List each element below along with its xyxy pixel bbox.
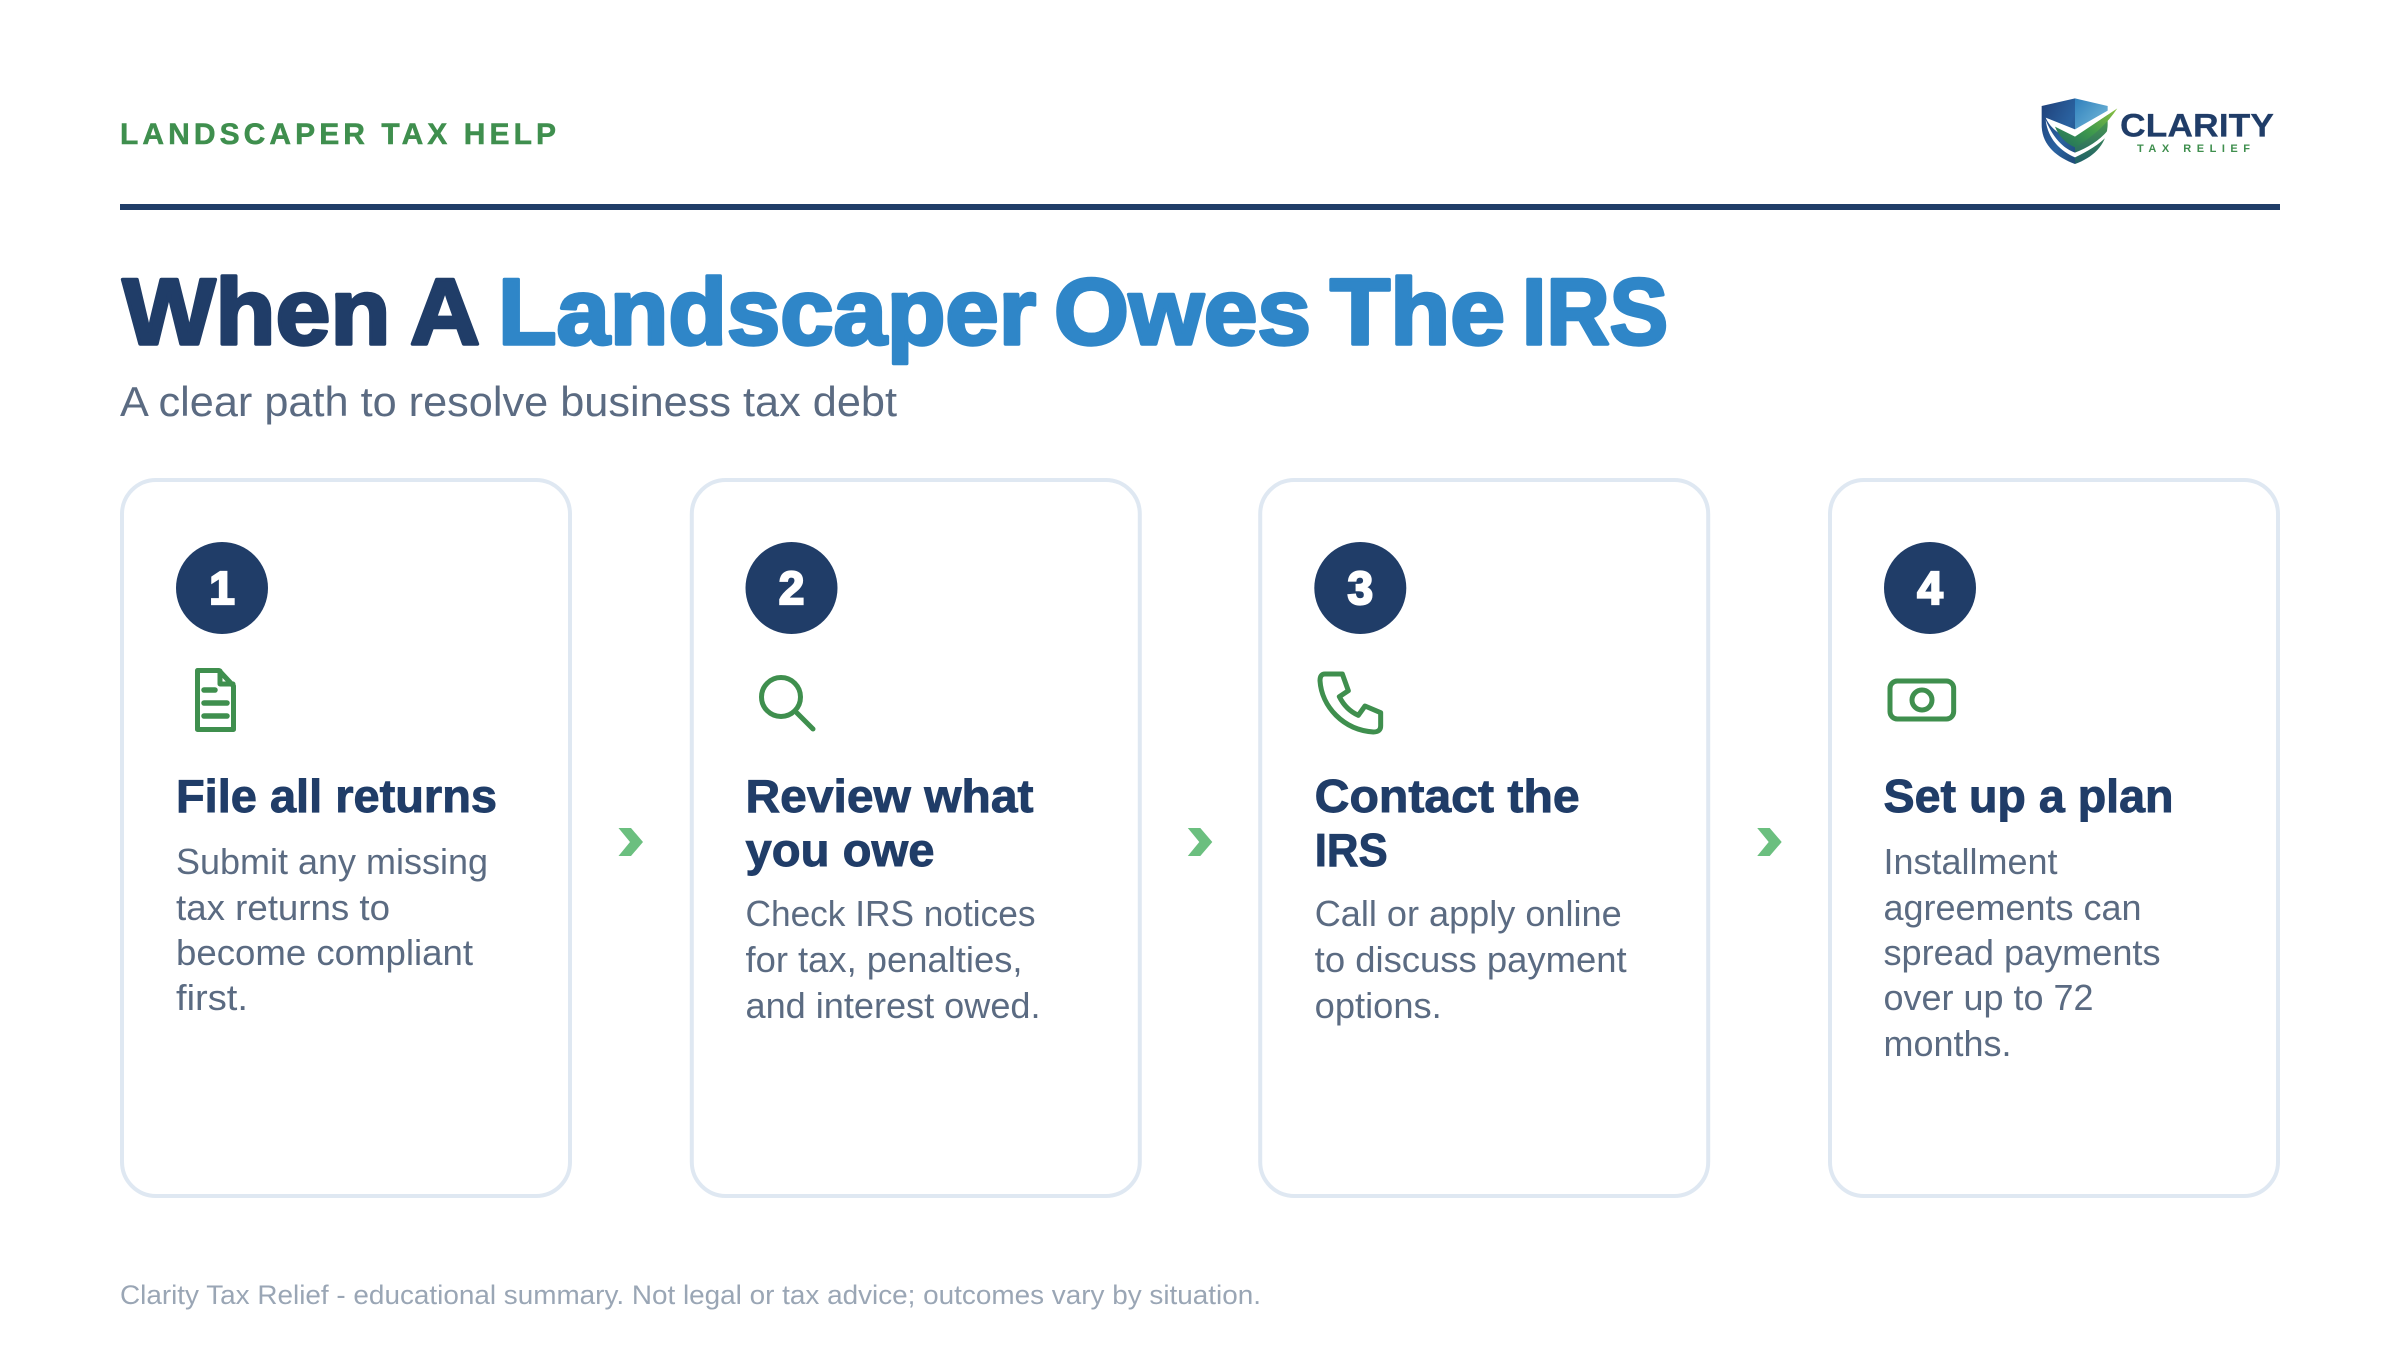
- step 2 description: and interest owed.: [746, 985, 1040, 1026]
- step 4 description: over up to 72: [1884, 977, 2094, 1018]
- step number 4: [1884, 542, 1976, 634]
- panel: step 4: [1830, 480, 2278, 1196]
- subtitle: A clear path to resolve business tax debt: [120, 378, 897, 425]
- arrow: step 2 to 3: [1188, 828, 1212, 856]
- step number 4: 4: [1917, 562, 1943, 614]
- step number 3: [1314, 542, 1406, 634]
- icon: magnifying glass: [762, 678, 813, 729]
- step 3 heading: [1315, 770, 1580, 876]
- step 1 description: Submit any missing: [176, 841, 488, 882]
- step 3 description: options.: [1315, 985, 1442, 1026]
- logo tagline: TAX RELIEF: [2137, 143, 2250, 155]
- step 4 description: spread payments: [1884, 932, 2160, 973]
- step 4 heading: Set up a plan: [1884, 770, 2174, 822]
- title: The: [1330, 259, 1505, 364]
- step 4 description: [1884, 841, 2160, 1064]
- step 1 description: tax returns to: [176, 887, 390, 928]
- logo wordmark: CLARITY: [2120, 108, 2274, 144]
- panel: step 3: [1260, 480, 1708, 1196]
- step 3 description: Call or apply online: [1315, 893, 1622, 934]
- panel: step 1: [122, 480, 570, 1196]
- icon: telephone: [1320, 674, 1381, 732]
- footer disclaimer: Clarity Tax Relief - educational summary. Not legal or tax advice; outcomes vary by situation.: [120, 1280, 1261, 1310]
- step 3 description: to discuss payment: [1315, 939, 1627, 980]
- title: [122, 259, 1668, 364]
- step 2 heading: Review what: [746, 770, 1034, 822]
- arrow: step 3 to 4: [1757, 828, 1782, 856]
- panel: step 2: [692, 480, 1140, 1196]
- step 4 description: months.: [1884, 1023, 2012, 1064]
- step number 1: [176, 542, 268, 634]
- eyebrow: Landscaper Tax Help: LANDSCAPER TAX HELP: [120, 118, 556, 151]
- step 1 description: first.: [176, 977, 248, 1018]
- icon: shield with check mark: [2042, 98, 2117, 164]
- step 4 description: Installment: [1884, 841, 2058, 882]
- step number 2: 2: [779, 562, 804, 614]
- step number 2: [746, 542, 838, 634]
- step number 3: 3: [1348, 562, 1373, 614]
- step number 1: 1: [209, 562, 235, 614]
- step 1 description: [176, 841, 488, 1018]
- header rule: [120, 204, 2280, 210]
- step 2 heading: you owe: [746, 824, 934, 876]
- icon: document: [198, 670, 234, 730]
- icon: banknote: [1890, 681, 1954, 719]
- step 2 heading: [746, 770, 1034, 876]
- step 3 heading: IRS: [1315, 824, 1388, 876]
- step 2 description: Check IRS notices: [746, 893, 1036, 934]
- logo: Clarity Tax Relief: [2042, 98, 2274, 164]
- title: IRS: [1522, 259, 1668, 364]
- title: Landscaper: [498, 259, 1036, 364]
- step 4 description: agreements can: [1884, 887, 2142, 928]
- step 3 heading: Contact the: [1315, 770, 1580, 822]
- title: When: [122, 259, 390, 364]
- step 2 description: for tax, penalties,: [746, 939, 1022, 980]
- step 3 description: [1315, 893, 1627, 1026]
- arrow: step 1 to 2: [618, 828, 643, 856]
- title: A: [410, 259, 480, 364]
- step 1 heading: File all returns: [176, 770, 497, 822]
- step 1 description: become compliant: [176, 932, 473, 973]
- title: Owes: [1054, 259, 1311, 364]
- step 2 description: [746, 893, 1040, 1026]
